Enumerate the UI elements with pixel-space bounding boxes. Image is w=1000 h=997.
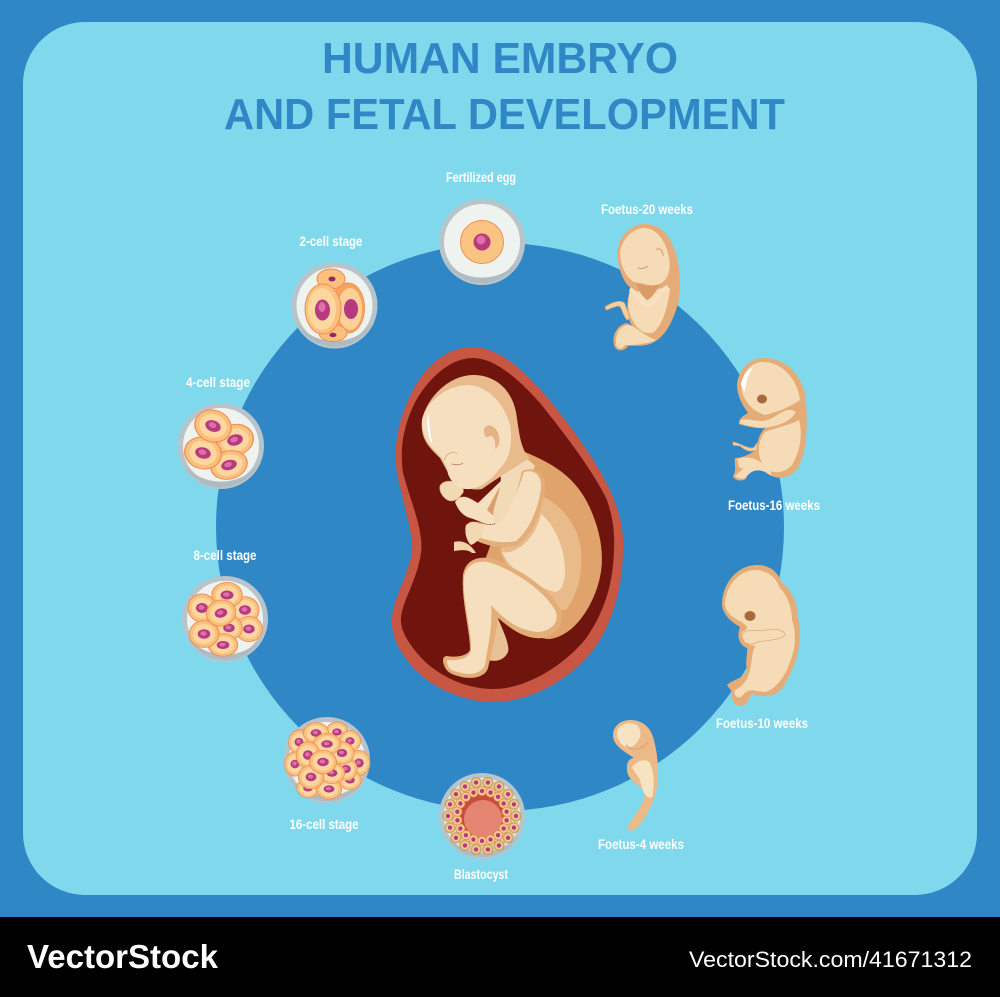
foetus 16 weeks bbox=[733, 358, 807, 480]
footer bar bbox=[0, 917, 1000, 997]
foetus 10 weeks bbox=[722, 565, 800, 706]
stage labels: Foetus-20 weeks bbox=[601, 202, 693, 217]
blue central circle bbox=[216, 243, 784, 811]
far arm bbox=[455, 477, 505, 524]
uterus cavity bbox=[401, 358, 614, 689]
fetal back bbox=[485, 452, 602, 639]
stage labels: Blastocyst bbox=[454, 867, 508, 882]
head bbox=[422, 385, 511, 489]
umbilical cord bbox=[454, 541, 476, 553]
footer: URL: VectorStock.com/41671312 bbox=[689, 947, 972, 972]
8-cell stage bbox=[184, 578, 266, 660]
head shadow bbox=[422, 375, 530, 489]
16-cell stage bbox=[285, 720, 370, 801]
hands bbox=[440, 481, 463, 501]
2-cell stage bbox=[294, 265, 375, 347]
foetus 20 weeks bbox=[605, 224, 680, 350]
foetus 4 weeks bbox=[613, 720, 658, 831]
stage labels: Fertilized egg bbox=[446, 170, 516, 185]
far leg bbox=[483, 612, 508, 661]
uterus wall bbox=[392, 347, 623, 702]
fetal torso midtone bbox=[500, 495, 581, 610]
stage labels bbox=[186, 170, 820, 882]
stage labels: Foetus-16 weeks bbox=[728, 498, 820, 513]
forehead highlight bbox=[427, 413, 433, 445]
fertilized egg bbox=[442, 202, 522, 283]
title: HUMAN EMBRYO bbox=[322, 34, 678, 83]
near thigh and leg bbox=[443, 558, 562, 678]
egg stages bbox=[180, 202, 522, 857]
blastocyst bbox=[442, 776, 522, 857]
central fetus in uterus bbox=[392, 347, 623, 702]
stage labels: 2-cell stage bbox=[300, 234, 363, 249]
neck and chest bbox=[493, 456, 535, 540]
stage labels: Foetus-10 weeks bbox=[716, 716, 808, 731]
stage labels: Foetus-4 weeks bbox=[598, 837, 684, 852]
stage labels: 8-cell stage bbox=[194, 548, 257, 563]
stage labels: 4-cell stage bbox=[186, 375, 250, 390]
near arm bbox=[466, 469, 545, 547]
ear bbox=[484, 426, 499, 449]
4-cell stage bbox=[180, 405, 262, 487]
title: AND FETAL DEVELOPMENT bbox=[224, 90, 785, 139]
eye bbox=[452, 463, 463, 465]
stage labels: 16-cell stage bbox=[290, 817, 359, 832]
title bbox=[224, 34, 785, 139]
fetal torso bbox=[502, 514, 565, 592]
footer: brand: VectorStock bbox=[27, 938, 219, 975]
